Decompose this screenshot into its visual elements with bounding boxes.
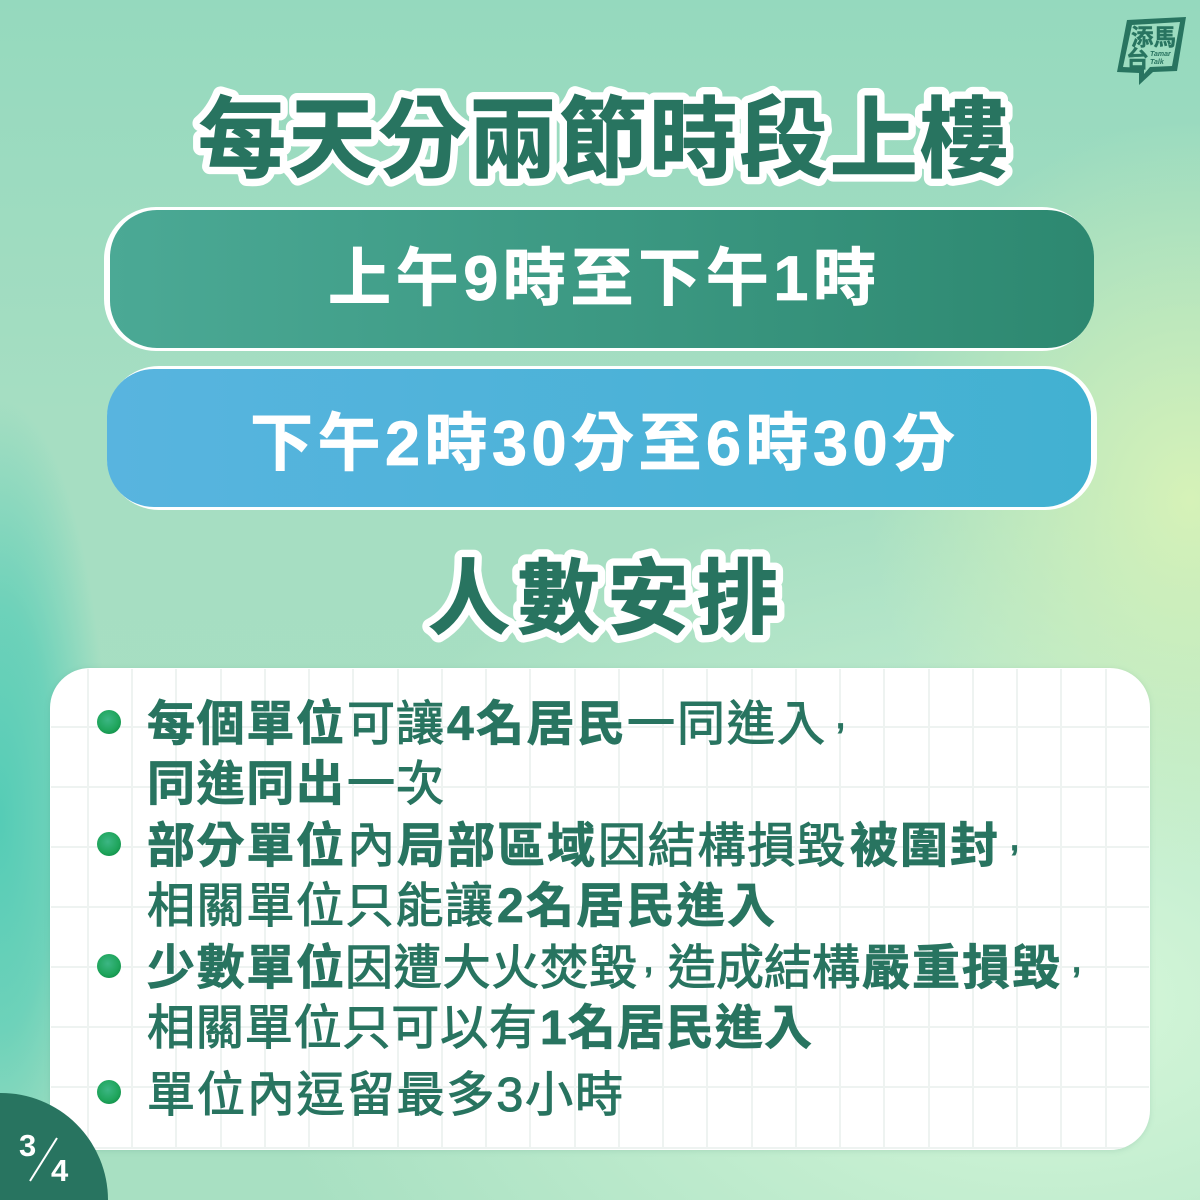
bullet 3: 造成結構 [668,942,860,995]
bullet 1: 一同進入 [627,698,825,751]
panel: arrangement list [50,668,1150,1150]
time slot: afternoon: 下午2時30分至6時30分 [250,409,955,479]
page indicator: 3/4: 3 [19,1128,36,1163]
bullet 1: 可讓 [347,698,444,751]
logo: Tamar Talk speech bubble: 台 [1126,46,1149,72]
bullet 4: 單位內逗留最多3小時 [147,1069,623,1122]
bullet 1: , [835,693,846,737]
page indicator: 3/4: 4 [51,1153,69,1188]
bullet 1: 每個單位 [147,698,344,751]
heading: headcount arrangement: 人數安排 [428,554,779,645]
bullet 3: 少數單位 [147,942,344,995]
bullet 2: 內 [347,820,395,873]
bullet 3 [97,937,1082,1055]
bullet 3: 相關單位只可以有 [147,1002,537,1055]
card background [50,668,1150,1150]
bullet 2: 被圍封 [850,820,998,873]
bullet 3: 因遭大火焚毀 [345,942,637,995]
logo: Tamar Talk speech bubble [1117,17,1186,85]
heading: headcount arrangement: 人數安排 [428,554,779,645]
bullet 3: 嚴重損毀 [862,942,1060,995]
bullet 2: 2名居民進入 [497,880,775,933]
bullet 2 [97,815,1020,933]
bullet 2: 局部區域 [397,820,595,873]
bullet 1 [97,693,846,811]
bullet 3: , [643,937,654,981]
bullet 2: 相關單位只能讓 [147,880,493,933]
time slot: morning: 上午9時至下午1時 [328,244,876,314]
logo: Tamar Talk speech bubble: Talk [1150,59,1165,66]
bullet 3: 1名居民進入 [540,1002,812,1055]
logo: Tamar Talk speech bubble: Tamar [1150,51,1172,58]
bullet 2: 因結構損毀 [598,820,845,873]
title: 每天分兩節時段上樓 [198,90,1008,189]
title: 每天分兩節時段上樓 [198,90,1008,189]
bullet 1: 4名居民 [447,698,625,751]
logo: Tamar Talk speech bubble: 添馬 [1131,24,1176,50]
bullet 2: 部分單位 [147,820,344,873]
time slot: afternoon [107,366,1097,510]
page indicator: 3/4 [0,1093,108,1200]
bullet 1: 一次 [347,758,444,811]
bullet 1: 同進同出 [147,758,344,811]
bullet 3: , [1071,937,1082,981]
bullet 2: , [1009,815,1020,859]
time slot: morning [104,207,1094,351]
